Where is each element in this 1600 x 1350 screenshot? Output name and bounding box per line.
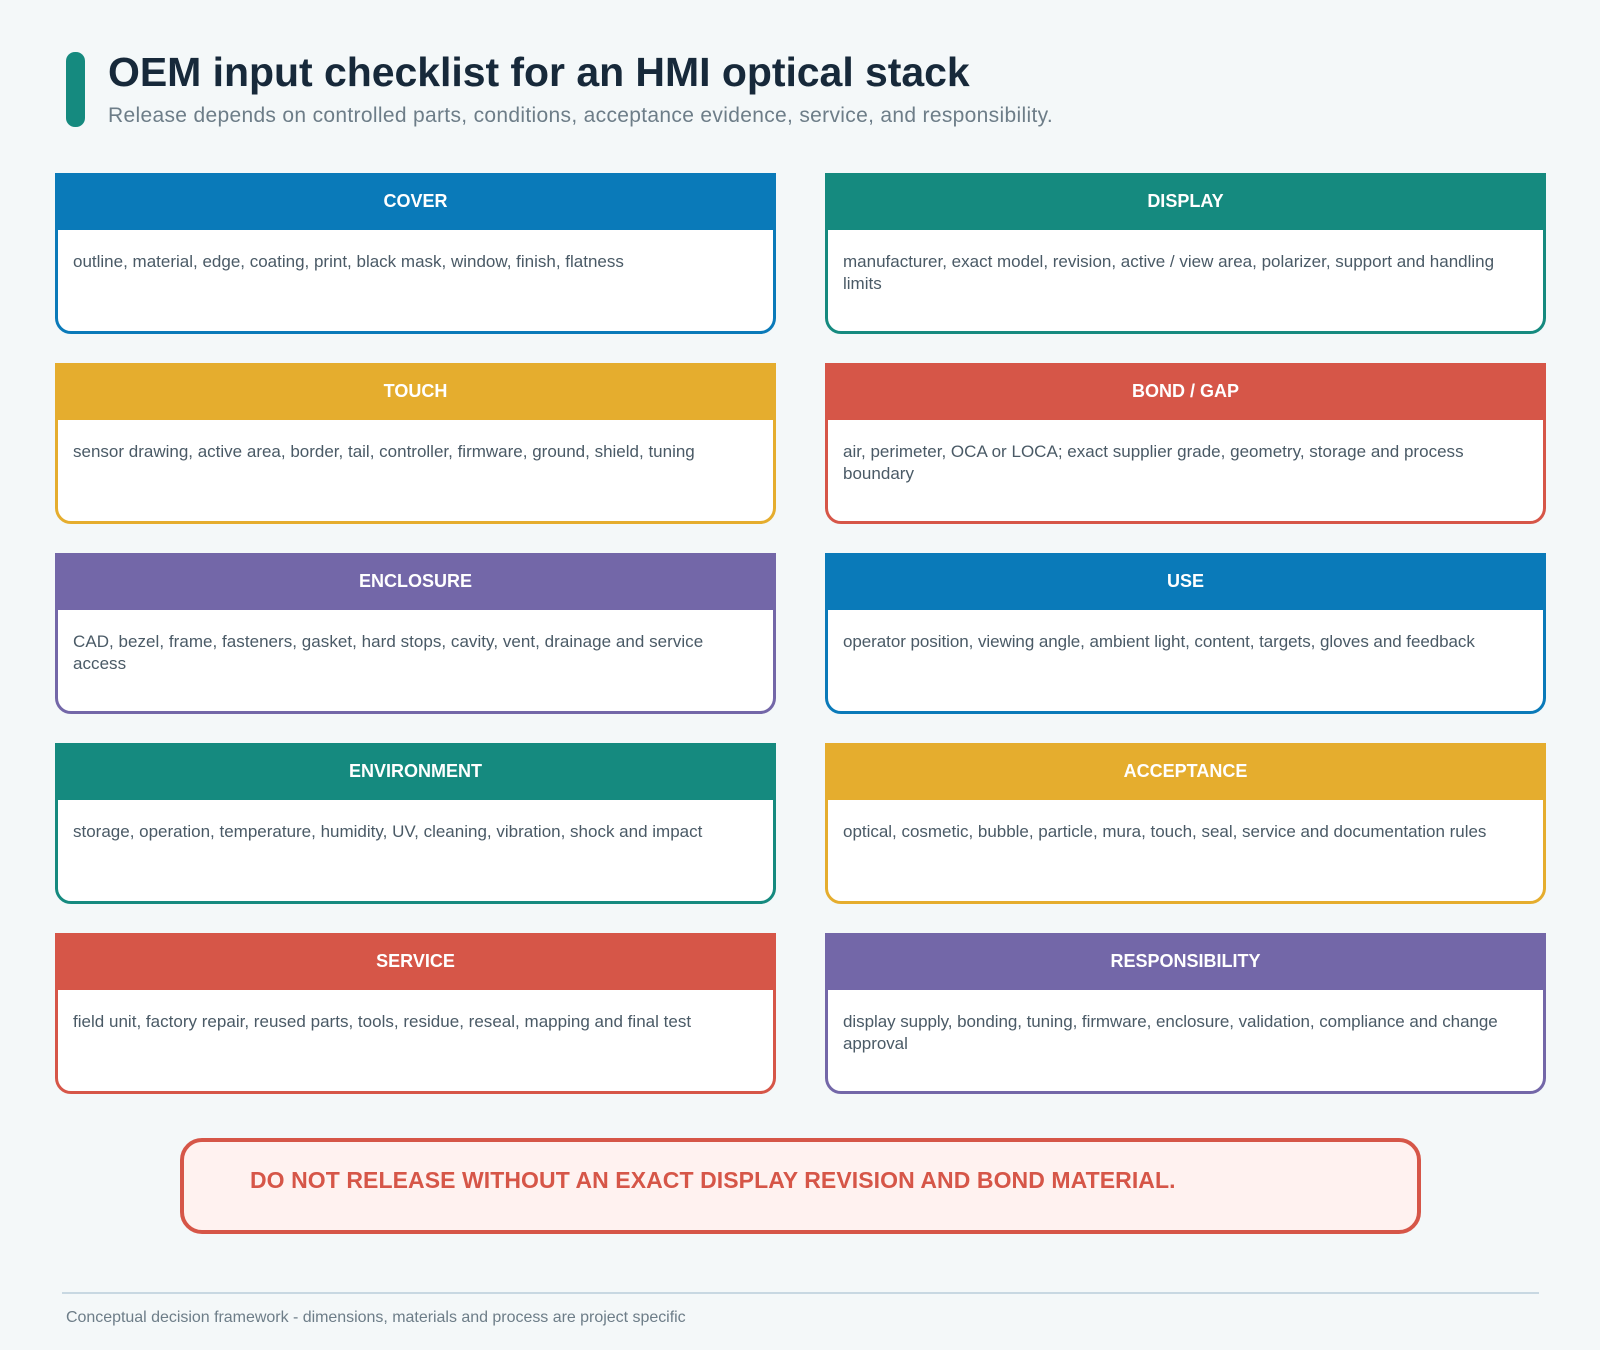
panel: touch	[55, 363, 776, 524]
bond / gap header	[825, 363, 1546, 420]
enclosure header: ENCLOSURE	[359, 571, 472, 591]
footer rule	[62, 1292, 1539, 1294]
display text: manufacturer, exact model, revision, active / view area, polarizer, support and handling limits	[843, 252, 1494, 293]
acceptance header: ACCEPTANCE	[1124, 761, 1247, 781]
bond / gap text: air, perimeter, OCA or LOCA; exact supplier grade, geometry, storage and process boundary	[843, 442, 1464, 483]
service text: field unit, factory repair, reused parts, tools, residue, reseal, mapping and final test	[73, 1012, 691, 1031]
touch text: sensor drawing, active area, border, tail, controller, firmware, ground, shield, tuning	[73, 442, 695, 461]
panel: responsibility	[825, 933, 1546, 1094]
panel: service	[55, 933, 776, 1094]
panel: enclosure	[55, 553, 776, 714]
environment text: storage, operation, temperature, humidity, UV, cleaning, vibration, shock and impact	[73, 822, 702, 841]
environment header	[55, 743, 776, 800]
use text: operator position, viewing angle, ambient light, content, targets, gloves and feedback	[843, 632, 1475, 651]
touch header: TOUCH	[384, 381, 447, 401]
warning text: DO NOT RELEASE WITHOUT AN EXACT DISPLAY REVISION AND BOND MATERIAL.	[250, 1167, 1176, 1193]
footer note: Conceptual decision framework - dimensions, materials and process are project specific	[66, 1309, 686, 1326]
service header	[55, 933, 776, 990]
bond / gap header: BOND / GAP	[1132, 381, 1239, 401]
cover header: COVER	[383, 191, 448, 211]
acceptance header	[825, 743, 1546, 800]
responsibility header	[825, 933, 1546, 990]
panel: cover	[55, 173, 776, 334]
responsibility text: display supply, bonding, tuning, firmware, enclosure, validation, compliance and change approval	[843, 1012, 1498, 1053]
display header	[825, 173, 1546, 230]
service header: SERVICE	[376, 951, 455, 971]
panel: display	[825, 173, 1546, 334]
cover text: outline, material, edge, coating, print, black mask, window, finish, flatness	[73, 252, 624, 271]
enclosure header	[55, 553, 776, 610]
panel: acceptance	[825, 743, 1546, 904]
callout: release warning	[180, 1138, 1421, 1234]
acceptance text: optical, cosmetic, bubble, particle, mura, touch, seal, service and documentation rules	[843, 822, 1486, 841]
use header	[825, 553, 1546, 610]
subtitle: Release depends on controlled parts, conditions, acceptance evidence, service, and responsibility.	[108, 104, 1053, 127]
touch header	[55, 363, 776, 420]
accent bar	[66, 52, 85, 127]
enclosure text: CAD, bezel, frame, fasteners, gasket, hard stops, cavity, vent, drainage and service access	[73, 632, 703, 673]
panel: use	[825, 553, 1546, 714]
title: OEM input checklist for an HMI optical stack	[108, 49, 970, 95]
panel: bond / gap	[825, 363, 1546, 524]
use header: USE	[1167, 571, 1204, 591]
environment header: ENVIRONMENT	[349, 761, 482, 781]
panel: environment	[55, 743, 776, 904]
display header: DISPLAY	[1147, 191, 1224, 211]
cover header	[55, 173, 776, 230]
responsibility header: RESPONSIBILITY	[1110, 951, 1261, 971]
